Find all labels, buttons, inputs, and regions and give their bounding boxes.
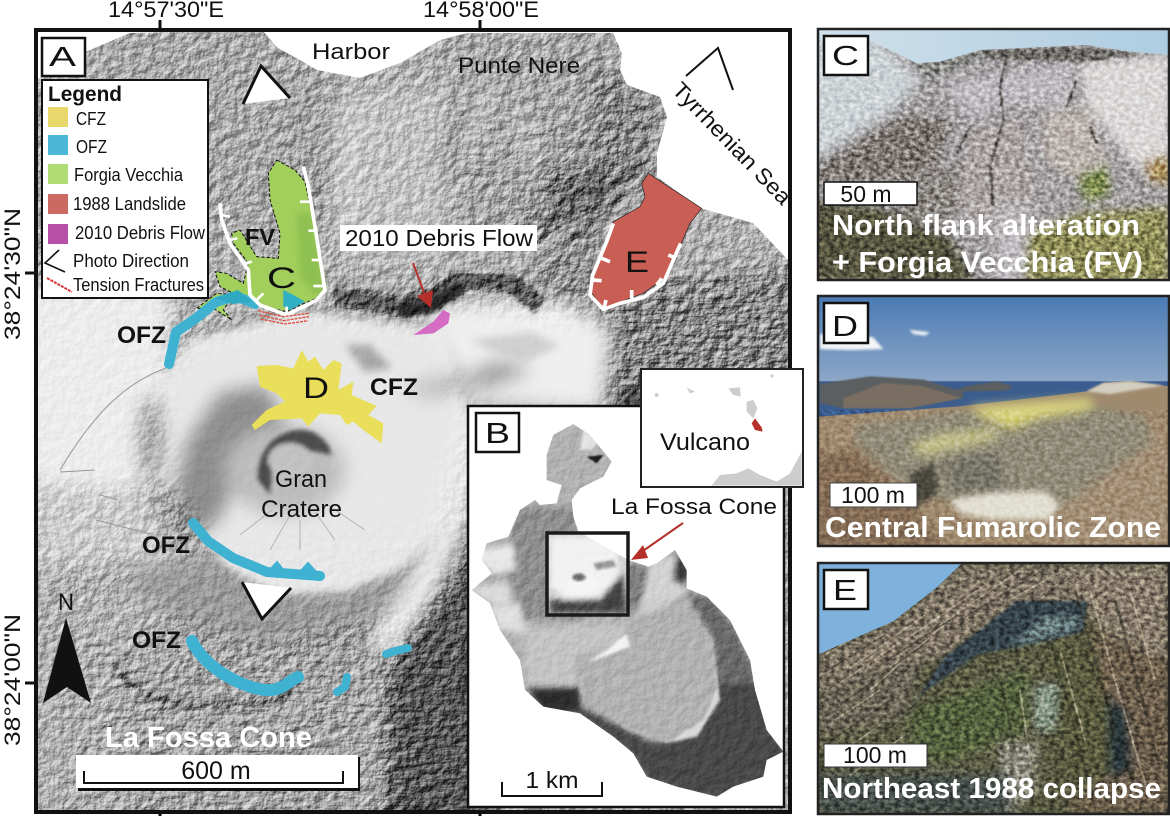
triangle outline south: [242, 582, 291, 619]
latitude label 1: 38°24'30"N: [0, 208, 25, 340]
La Fossa box: [547, 533, 628, 615]
panel label B: B: [485, 418, 510, 450]
CFZ: CFZ: [76, 109, 106, 129]
1988 Landslide: 1988 Landslide: [73, 194, 186, 214]
title La Fossa Cone: La Fossa Cone: [105, 722, 312, 754]
label OFZ west: OFZ: [117, 322, 166, 349]
panel label A: A: [49, 41, 76, 72]
bright ridge: [380, 410, 476, 650]
label FV: FV: [245, 224, 276, 250]
panel: map B: [467, 406, 790, 807]
Vulcano highlighted: [752, 418, 763, 432]
label OFZ south: OFZ: [132, 627, 181, 654]
panel: photo D: [817, 295, 1170, 547]
radial gullies: [240, 505, 365, 550]
OFZ: [48, 135, 107, 157]
scarp outline north flank: [220, 167, 325, 315]
panel: map A: [0, 0, 820, 826]
sea: [36, 30, 790, 262]
scale bar 1 km: 1 km: [526, 767, 578, 793]
scale 100 m: [824, 742, 927, 768]
panel label B: [476, 413, 519, 452]
legend title: Legend: [48, 83, 122, 106]
OFZ small patches: [337, 648, 408, 692]
tension fractures: [258, 311, 309, 324]
label Punte Nere: Punte Nere: [458, 53, 580, 78]
caption C: [832, 210, 1143, 279]
panel label A: [42, 38, 85, 76]
label C: C: [267, 262, 296, 295]
texture: [36, 30, 790, 812]
north direction marker: [686, 48, 733, 90]
fractures west: [60, 368, 166, 534]
label Harbor: Harbor: [312, 39, 390, 64]
arrow to box: [631, 523, 683, 560]
sky: [817, 562, 963, 655]
caption C: + Forgia Vecchia (FV): [832, 247, 1143, 279]
map frame: [36, 30, 790, 812]
photo direction triangle north: [243, 66, 290, 104]
north arrow: [43, 589, 91, 703]
photo direction triangle south: [242, 582, 291, 619]
label Gran Cratere: [261, 466, 342, 523]
Forgia Vecchia zone: [197, 160, 325, 320]
CFZ zone: [252, 350, 383, 443]
label Gran Cratere: Gran: [275, 466, 327, 493]
Vulcano island relief: [472, 424, 784, 797]
scale bar 600 m: 600 m: [181, 757, 251, 785]
callout 2010 Debris Flow: 2010 Debris Flow: [345, 225, 533, 251]
label E: E: [625, 246, 649, 279]
OFZ south: [192, 641, 298, 690]
caption D: Central Fumarolic Zone: [825, 512, 1161, 544]
legend: [42, 80, 208, 298]
panel label E: E: [833, 575, 857, 607]
Photo Direction: Photo Direction: [73, 251, 189, 271]
caption E: Northeast 1988 collapse: [822, 773, 1161, 805]
south arc gully: [115, 665, 292, 705]
1988 landslide: [590, 173, 702, 309]
scale 50 m: 50 m: [840, 181, 892, 207]
CFZ: [48, 107, 106, 129]
OFZ north: [169, 290, 255, 364]
label CFZ: CFZ: [370, 374, 418, 401]
photo D image: [817, 295, 1170, 547]
OFZ: OFZ: [76, 137, 107, 157]
panel label D: D: [832, 311, 858, 343]
flank streaks: [300, 90, 590, 230]
panel label E: [824, 570, 868, 609]
scale bar 1 km: [502, 767, 602, 796]
Gran Cratere rim: [258, 430, 332, 495]
map hillshade: [38, 32, 788, 810]
triangle outline north: [243, 66, 290, 104]
scale 100 m: 100 m: [841, 482, 905, 508]
panel: photo C: [810, 27, 1170, 283]
Forgia Vecchia: Forgia Vecchia: [74, 165, 184, 185]
scale 50 m: [824, 181, 917, 207]
label OFZ crater: OFZ: [142, 532, 190, 559]
photo E image: [817, 562, 1170, 816]
inset map: Aeolian islands: [641, 369, 803, 487]
panel label D: [824, 303, 868, 343]
fumarole zone OFZ crater south: [193, 523, 320, 576]
label Tyrrhenian Sea: Tyrrhenian Sea: [667, 77, 797, 210]
2010 Debris Flow: 2010 Debris Flow: [75, 223, 206, 243]
inset box relief: [547, 533, 628, 615]
label Gran Cratere: Cratere: [261, 496, 342, 523]
cone: [150, 312, 470, 595]
panel label C: C: [832, 40, 859, 71]
arrow to debris flow: [413, 263, 433, 308]
2010 debris flow patch: [413, 310, 450, 335]
label Vulcano: Vulcano: [660, 429, 750, 456]
slope streaks: [825, 570, 1160, 810]
sky: [817, 27, 1170, 63]
latitude label 2: 38°24'00"N: [0, 614, 25, 746]
shaded crater walls: [139, 362, 530, 545]
photo C image: [810, 27, 1170, 283]
Tension Fractures: Tension Fractures: [73, 275, 204, 295]
panel label C: [824, 36, 868, 75]
debris flow scar: [335, 280, 540, 312]
label La Fossa Cone: La Fossa Cone: [611, 494, 777, 519]
label D: D: [303, 372, 329, 405]
islands: [655, 374, 802, 486]
north arrow: N: [58, 589, 74, 616]
panel: photo E: [817, 562, 1170, 816]
scale 100 m: 100 m: [843, 742, 907, 768]
coordinate ticks: [25, 20, 480, 816]
scale bar 600 m: [76, 755, 360, 791]
caption C: North flank alteration: [832, 210, 1140, 242]
